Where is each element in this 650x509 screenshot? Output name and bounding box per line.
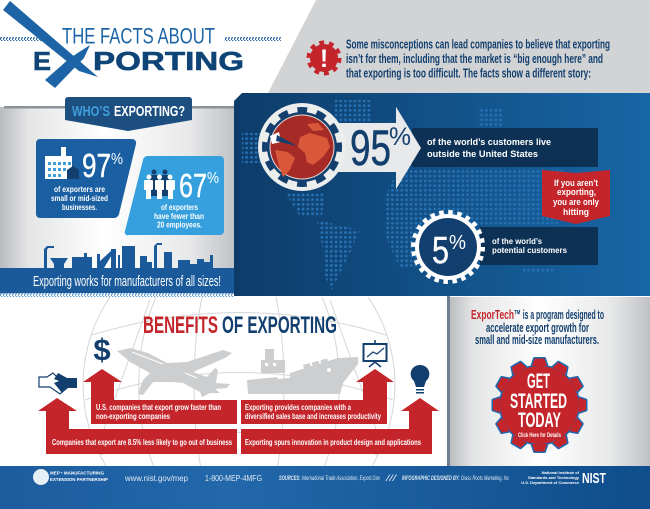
- heading banner: who's exporting: [65, 97, 192, 131]
- stat card: 67%: have fewer than: [154, 211, 204, 221]
- intro text: [346, 38, 610, 80]
- title: E: [33, 46, 51, 76]
- NIST logo: [521, 470, 606, 487]
- panel: ExporTech: [447, 296, 650, 466]
- icon: people: [144, 170, 175, 199]
- program text: [471, 307, 604, 347]
- top grey intro panel: [268, 0, 650, 93]
- arrow: productivity: Exporting provides companies with a: [245, 403, 351, 412]
- NIST logo: NIST: [582, 470, 606, 487]
- heading banner: who's exporting: EXPORTING?: [114, 103, 185, 120]
- callout: red ribbon: exporting,: [557, 187, 596, 198]
- arrow: 95%: 95: [350, 120, 391, 176]
- icon: plane: [117, 348, 232, 397]
- arrow: innovation: Exporting spurs innovation in product design and applications: [245, 438, 421, 447]
- callout box: 5% text: potential customers: [492, 245, 567, 255]
- icon: building: [45, 147, 79, 179]
- arrow: grow faster: non-exporting companies: [96, 412, 170, 421]
- icon: dollar sign: $: [93, 332, 111, 367]
- stat card: 67%: %: [207, 170, 219, 187]
- arrow: 95%: of the world’s customers live: [427, 137, 551, 148]
- callout: red ribbon: you are only: [553, 197, 600, 208]
- sources: [279, 473, 509, 483]
- phone: 1-800-MEP-4MFG: [205, 473, 262, 483]
- sources: SOURCES: International Trade Association, Export.Gov: [279, 476, 381, 482]
- icon: red gear alert: [308, 42, 340, 74]
- stat card: 97%: of exporters are: [54, 184, 105, 194]
- globe outline background: [83, 297, 395, 466]
- arrow: productivity: diversified sales base and increases productivity: [245, 412, 381, 421]
- panel: who's exporting: [0, 97, 235, 297]
- MEP logo: MEP • MANUFACTURING: [50, 470, 104, 476]
- arrow: grow faster: U.S. companies that export grow faster than: [96, 403, 221, 412]
- stat card: 67%: 67: [179, 167, 207, 204]
- stat card: 97%: businesses.: [62, 202, 97, 212]
- footer: [0, 466, 650, 509]
- icon: handshake: [39, 373, 77, 394]
- heading: benefits of exporting: BENEFITS: [143, 312, 218, 339]
- MEP logo: EXTENSION PARTNERSHIP: [50, 477, 108, 482]
- icon: factories skyline: [44, 243, 213, 268]
- stat card: 67%: 20 employees.: [157, 220, 202, 230]
- heading: benefits of exporting: [143, 312, 337, 339]
- title: PORTING: [93, 46, 244, 76]
- arrow: innovation: [241, 398, 439, 454]
- stat card: 67%: [125, 156, 224, 235]
- button: get started today: GET: [527, 370, 550, 393]
- heading: benefits of exporting: OF EXPORTING: [222, 312, 337, 339]
- button: get started today: [493, 358, 586, 452]
- arrow: productivity: [241, 369, 394, 424]
- footer band: [0, 268, 234, 297]
- arrow: 95%: [338, 107, 598, 189]
- arrows: benefits: [38, 369, 439, 454]
- icon: cargo ship: [247, 349, 358, 394]
- arrow: 95%: %: [389, 123, 411, 151]
- title: [0, 1, 281, 88]
- icon: white gear with 5%: 5: [432, 230, 449, 272]
- arrow: grow faster: [83, 369, 237, 424]
- button: get started today: TODAY: [518, 409, 561, 432]
- stat card: 97%: [36, 139, 136, 218]
- icon: presentation chart: [364, 340, 386, 367]
- heading banner: who's exporting: WHO’S: [72, 103, 110, 120]
- icon: light bulb: [411, 365, 429, 394]
- icon: red gear alert: !: [320, 45, 328, 73]
- NIST logo: U.S. Department of Commerce: [521, 480, 580, 485]
- callout: red ribbon: [542, 170, 610, 224]
- callout box: 5% text: [480, 227, 598, 265]
- sources: INFOGRAPHIC DESIGNED BY: Grass Roots Marketing, Inc: [402, 476, 509, 482]
- icon: white gear with 5%: %: [449, 232, 466, 254]
- callout box: 5% text: of the world’s: [492, 236, 542, 246]
- stat card: 97%: 97: [82, 147, 111, 184]
- icon: white gear with 5%: [414, 212, 482, 282]
- panel: world customers: [234, 93, 650, 296]
- website: www.nist.gov/mep: [124, 473, 188, 483]
- sources: ///: [385, 473, 398, 483]
- footer band: Exporting works for manufacturers of all sizes!: [33, 273, 221, 290]
- NIST logo: National Institute of: [542, 470, 580, 475]
- stat card: 67%: of exporters: [161, 202, 198, 212]
- arrow: 95%: outside the United States: [427, 149, 538, 160]
- stat card: 97%: %: [111, 151, 123, 168]
- NIST logo: Standards and Technology: [528, 475, 580, 480]
- title: THE FACTS ABOUT: [62, 24, 215, 48]
- MEP logo: [33, 469, 108, 485]
- button: get started today: STARTED: [510, 390, 567, 413]
- stat card: 97%: small or mid-sized: [51, 193, 108, 203]
- icon: gear with globe: [258, 103, 346, 191]
- dotted world map: [242, 100, 565, 290]
- arrow: out of business: Companies that export are 8.5% less likely to go out of business: [52, 438, 232, 447]
- button: get started today: Click Here for Details: [518, 433, 561, 439]
- program text: ExporTech: [471, 307, 514, 322]
- arrow: out of business: [38, 398, 237, 454]
- callout: red ribbon: hitting: [563, 207, 589, 218]
- callout: red ribbon: If you aren’t: [554, 178, 599, 189]
